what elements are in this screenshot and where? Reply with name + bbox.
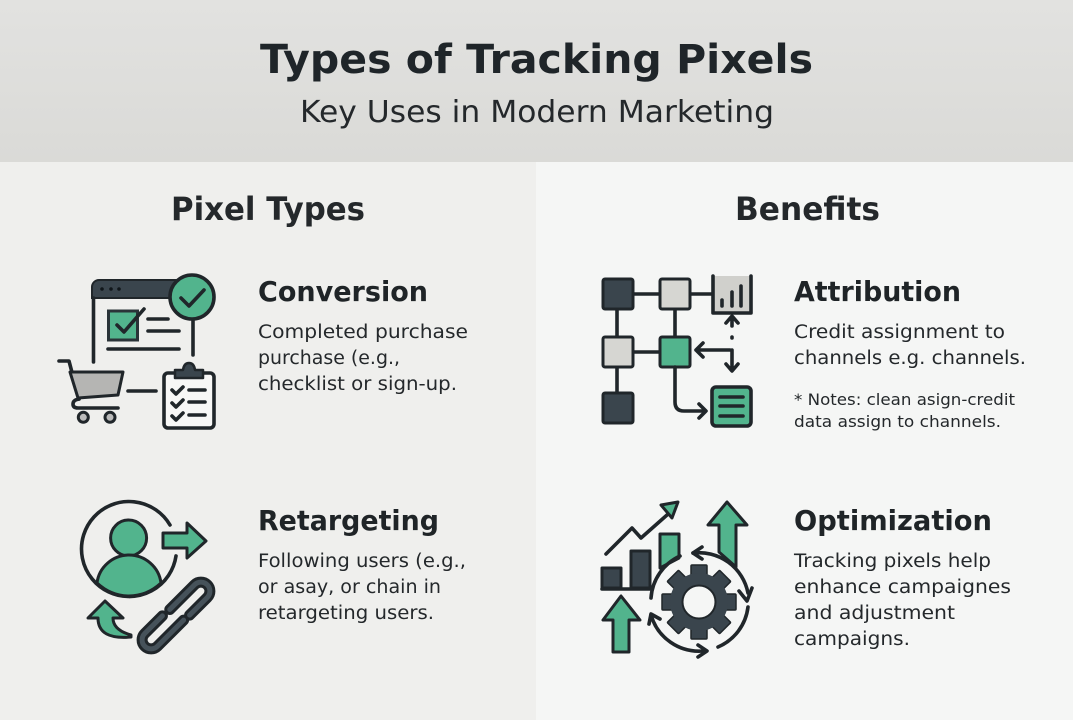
header band [0, 0, 1073, 162]
text: retargeting: Following users (e.g., [258, 551, 466, 572]
heading: pixel types: Pixel Types [171, 190, 365, 228]
note: * Notes: clean asign-credit [794, 390, 1015, 409]
text: optimization [793, 504, 1011, 650]
text: optimization: Optimization [794, 504, 992, 537]
icon: retargeting [82, 502, 214, 653]
heading: benefits: Benefits [735, 190, 880, 228]
subtitle: Key Uses in Modern Marketing [300, 95, 774, 130]
note: data assign to channels. [794, 412, 1001, 431]
text: optimization: Tracking pixels help [793, 551, 991, 572]
right panel background [536, 162, 1073, 720]
text: optimization: and adjustment [794, 603, 955, 624]
text: conversion: Conversion [258, 275, 428, 308]
text: optimization: enhance campaignes [794, 577, 1011, 598]
text: attribution: channels e.g. channels. [794, 348, 1026, 369]
text: retargeting: retargeting users. [258, 603, 434, 624]
text: conversion: Completed purchase [258, 322, 468, 343]
text: retargeting: or asay, or chain in [258, 577, 441, 598]
text: attribution: Credit assignment to [794, 322, 1005, 343]
text: attribution [794, 275, 1026, 431]
text: optimization: campaigns. [794, 629, 910, 650]
text: conversion: checklist or sign-up. [258, 374, 457, 395]
text: retargeting [258, 504, 466, 624]
text: retargeting: Retargeting [258, 504, 439, 537]
text: attribution: Attribution [794, 275, 961, 308]
text: conversion: purchase (e.g., [258, 348, 400, 369]
icon: optimization [602, 502, 752, 657]
note [794, 390, 1015, 431]
left panel background [0, 162, 536, 720]
icon: attribution [603, 276, 751, 426]
text: conversion [258, 275, 468, 395]
icon: conversion [59, 275, 214, 428]
title: Types of Tracking Pixels [260, 37, 813, 83]
